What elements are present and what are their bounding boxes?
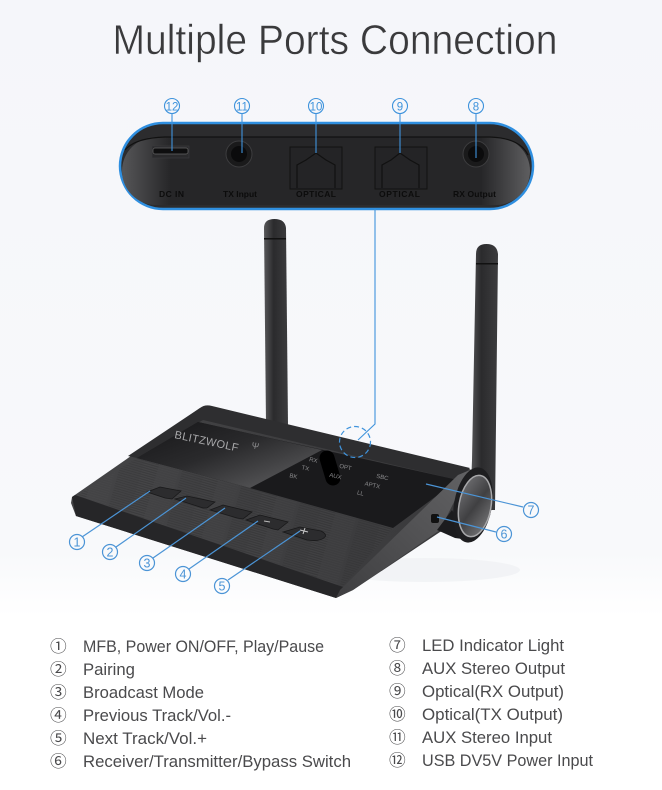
callout 4 (176, 521, 258, 582)
port: DC IN: DC IN (159, 189, 184, 199)
callout 1: 1 (74, 536, 81, 550)
legend: right column: ⑩ (389, 705, 406, 724)
callout 8: 8 (473, 102, 479, 114)
callout 1 (70, 491, 150, 550)
legend: left column: ④ (50, 706, 67, 725)
device body (71, 405, 498, 598)
port: optical TX (290, 147, 342, 199)
button 3 (210, 505, 252, 519)
callout 4: 4 (180, 568, 187, 582)
callout 11: 11 (236, 102, 248, 114)
legend: right column: ⑦ (389, 636, 406, 655)
mode labels: RX (308, 457, 318, 465)
signal icon: Ψ (251, 440, 260, 452)
legend: left column: Broadcast Mode (83, 683, 204, 702)
port: optical RX (375, 147, 427, 199)
legend: right column: Optical(RX Output) (422, 682, 564, 701)
callout 6: 6 (501, 528, 508, 542)
leader line from marker to port panel (358, 209, 375, 440)
legend: left column: ⑥ (50, 752, 67, 771)
legend: left column: ③ (50, 683, 67, 702)
button 2 (175, 496, 215, 508)
legend: right column: USB DV5V Power Input (422, 751, 593, 770)
antenna: right (470, 244, 498, 510)
port: RX output: RX Output (453, 189, 496, 199)
legend: right column: ⑨ (389, 682, 406, 701)
port: optical TX: OPTICAL (296, 189, 336, 199)
callout 10: 10 (310, 102, 322, 114)
callout 10 (308, 98, 324, 153)
right slanted edge (336, 470, 470, 598)
port: TX input: TX Input (223, 189, 257, 199)
mode labels: LL (356, 490, 365, 498)
button 1 (147, 487, 181, 499)
callout 9: 9 (397, 102, 403, 114)
legend: right column: ⑪ (389, 728, 406, 747)
mode labels: SBC (376, 474, 390, 482)
legend: left column: MFB, Power ON/OFF, Play/Pause (83, 637, 324, 656)
legend: left column: Pairing (83, 660, 135, 679)
legend: right column: AUX Stereo Input (422, 728, 552, 747)
mode labels: TX (301, 465, 310, 473)
legend: right column: Optical(TX Output) (422, 705, 563, 724)
button 5 (283, 527, 326, 541)
legend: left column: Receiver/Transmitter/Bypass Switch (83, 752, 351, 771)
callout 12 (164, 98, 180, 151)
mode labels: OPT (339, 464, 352, 472)
wood grain (75, 458, 393, 590)
port: TX input (223, 141, 257, 199)
title: Multiple Ports Connection (112, 16, 558, 63)
antenna: left (264, 219, 288, 425)
front edge (72, 495, 343, 598)
mode labels: APTX (364, 481, 381, 491)
legend: left column: Previous Track/Vol.- (83, 706, 231, 725)
dashed circle marker (340, 426, 370, 458)
legend: left column: ① (50, 637, 67, 656)
callout 2 (102, 498, 186, 560)
callout 6 (437, 517, 512, 542)
dark underside near dial (437, 510, 470, 540)
legend: left column: ② (50, 660, 67, 679)
callout 12: 12 (166, 102, 178, 114)
legend: right column: LED Indicator Light (422, 636, 564, 655)
ground shadow (330, 558, 520, 582)
brand logo: BLITZWOLF (173, 429, 240, 455)
panel: rear ports view (120, 123, 533, 209)
button 4 (246, 515, 288, 530)
callout 7 (426, 484, 538, 518)
callout 5: 5 (219, 580, 226, 594)
glass panel (137, 422, 458, 528)
legend: left column: Next Track/Vol.+ (83, 729, 207, 748)
legend: right column: AUX Stereo Output (422, 659, 565, 678)
callout 9 (392, 98, 408, 153)
callout 2: 2 (107, 546, 114, 560)
port: RX output (453, 141, 496, 199)
legend: left column (50, 637, 351, 771)
mode labels: BK (289, 473, 298, 481)
end cap dial (448, 464, 498, 546)
legend: right column (389, 636, 593, 770)
callout 3 (140, 508, 225, 570)
AUX pill (327, 458, 333, 478)
legend: right column: ⑧ (389, 659, 406, 678)
callout 5 (214, 531, 300, 594)
mode labels: AUX (329, 473, 342, 481)
glass reflection (137, 422, 322, 488)
device callouts (70, 484, 538, 594)
callout 8 (468, 98, 484, 158)
mode labels (289, 457, 390, 498)
port: DC IN (152, 146, 189, 199)
port: optical RX: OPTICAL (379, 189, 420, 199)
callout 7: 7 (528, 504, 535, 518)
legend: left column: ⑤ (50, 729, 67, 748)
callout 3: 3 (144, 556, 151, 570)
switch (431, 514, 439, 523)
callout 11 (234, 98, 250, 153)
port callouts (164, 98, 484, 158)
top ridge (128, 405, 470, 480)
legend: right column: ⑫ (389, 751, 406, 770)
